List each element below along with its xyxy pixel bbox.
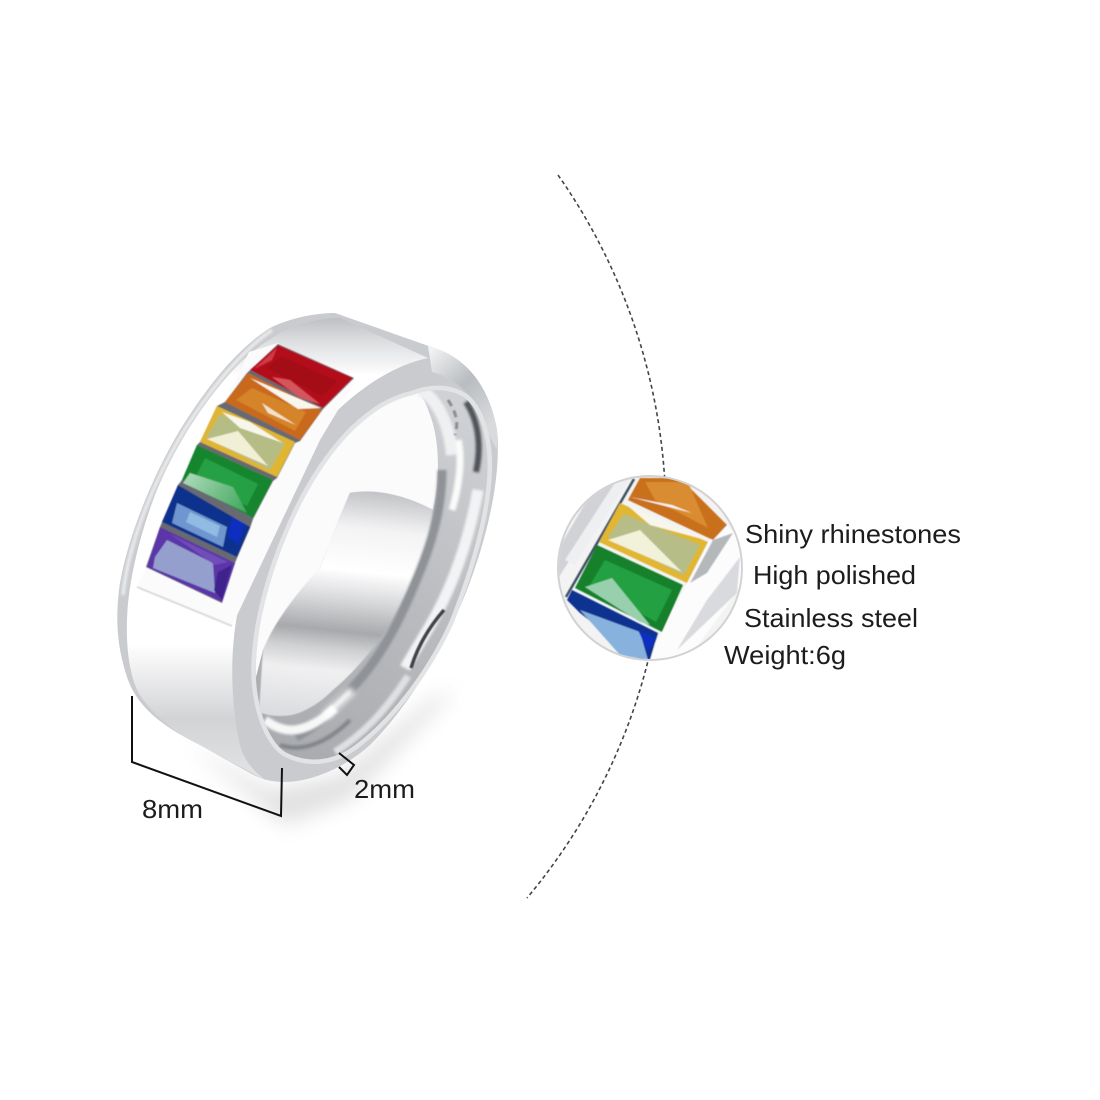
ring back bevel — [428, 346, 497, 450]
gem: blue — [162, 485, 250, 557]
gem: green — [182, 445, 273, 518]
interior base — [256, 390, 488, 760]
ring outer silhouette — [117, 313, 498, 782]
magnifier right reflection — [677, 557, 740, 650]
gem strip underlay — [146, 344, 354, 603]
ring shadow — [190, 690, 455, 825]
stainless steel ring — [117, 313, 500, 782]
interior top-right reflections — [420, 390, 452, 455]
detail magnifier circle — [557, 475, 743, 661]
ring interior — [256, 390, 488, 760]
interior polished barrel — [259, 492, 433, 716]
dashed arc divider — [527, 175, 666, 898]
dimension: 2mm bracket — [339, 753, 354, 775]
magnifier gem: yellow — [599, 503, 708, 583]
feature: stainless steel: Stainless steel — [744, 603, 918, 633]
magnifier gem: blue — [567, 590, 658, 660]
gem: orange — [225, 373, 322, 440]
gem: purple — [147, 527, 235, 602]
feature: high polished: High polished — [753, 560, 916, 590]
dimension label: 2mm: 2mm — [354, 774, 415, 804]
gem: red — [250, 345, 353, 408]
magnifier disc — [558, 476, 742, 660]
ring rim plate — [256, 390, 488, 759]
feature list — [724, 519, 961, 670]
magnifier right white band — [649, 524, 741, 659]
ring front face — [127, 318, 428, 780]
gems column — [146, 344, 354, 603]
feature: shiny rhinestones: Shiny rhinestones — [745, 519, 961, 549]
stone channel plate — [137, 343, 356, 626]
gem: yellow — [200, 406, 295, 477]
magnifier gem: green — [575, 545, 683, 632]
feature: weight: Weight:6g — [724, 640, 846, 670]
ring left bevel highlight — [123, 330, 272, 595]
dimension: 8mm bracket — [132, 696, 282, 816]
channel lower edge — [137, 587, 232, 626]
magnifier gem: orange — [628, 478, 727, 540]
magnifier right grey band — [690, 533, 733, 583]
interior white wall — [256, 393, 438, 677]
magnifier left silver stripes — [559, 484, 614, 576]
dimension label: 8mm: 8mm — [142, 794, 203, 824]
